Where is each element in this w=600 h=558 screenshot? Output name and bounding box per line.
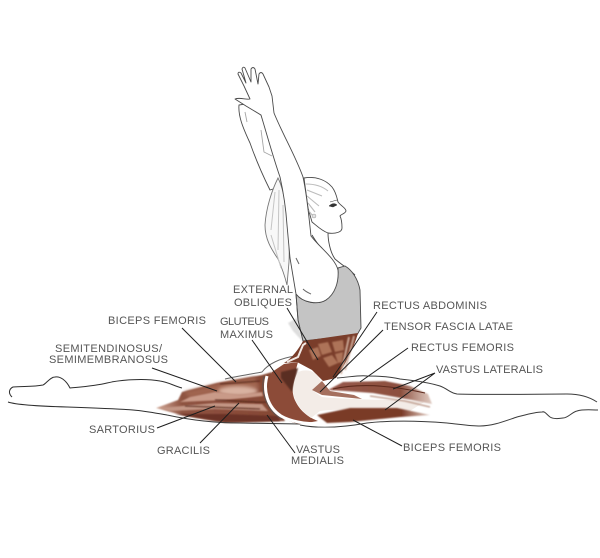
line: biceps femoris right xyxy=(353,420,402,446)
label: external obliques: EXTERNAL xyxy=(233,284,293,296)
back raised arm xyxy=(239,104,285,190)
left leg outline xyxy=(8,377,182,415)
line: vastus lateralis xyxy=(385,373,435,410)
tank top xyxy=(296,266,361,341)
line: tensor fascia latae xyxy=(320,330,383,392)
line: rectus femoris xyxy=(360,348,408,382)
right thigh upper muscles xyxy=(312,381,432,407)
label: semitendinosus / semimembranosus: SEMITENDINOSUS/ xyxy=(55,343,163,355)
line: sartorius xyxy=(157,406,215,428)
label: vastus medialis: MEDIALIS xyxy=(291,455,344,467)
label: gracilis: GRACILIS xyxy=(157,445,210,457)
leader lines xyxy=(152,308,435,453)
left thigh lower outline xyxy=(167,415,300,424)
label: semitendinosus / semimembranosus: SEMIMEMBRANOSUS xyxy=(49,354,168,366)
gluteus xyxy=(263,362,322,424)
line: semitendinosus xyxy=(152,368,217,391)
waistline xyxy=(296,294,303,341)
label: sartorius: SARTORIUS xyxy=(89,424,155,436)
line: external obliques xyxy=(287,308,318,360)
right hip tendon band xyxy=(293,370,424,418)
line: rectus abdominis xyxy=(333,312,377,377)
label: tensor fascia latae: TENSOR FASCIA LATAE xyxy=(384,321,513,333)
label: biceps femoris right: BICEPS FEMORIS xyxy=(403,442,501,454)
near raised arm and shoulder xyxy=(235,67,338,303)
abdominal muscles xyxy=(284,333,358,381)
ponytail xyxy=(265,178,289,285)
waist shadow xyxy=(288,318,303,342)
line: biceps femoris left xyxy=(182,328,236,382)
right thigh lower outline xyxy=(300,421,447,427)
right leg outline xyxy=(337,376,598,426)
right thigh lower muscle xyxy=(317,408,430,423)
label: gluteus maximus: MAXIMUS xyxy=(220,329,273,341)
left thigh upper double outline xyxy=(225,356,296,379)
label: external obliques: OBLIQUES xyxy=(234,297,292,309)
label: vastus lateralis: VASTUS LATERALIS xyxy=(436,364,543,376)
label: biceps femoris left: BICEPS FEMORIS xyxy=(108,315,206,327)
label: rectus abdominis: RECTUS ABDOMINIS xyxy=(373,300,487,312)
head and neck xyxy=(304,177,355,275)
label: vastus medialis: VASTUS xyxy=(296,444,340,456)
figure: dancer in a split xyxy=(8,67,598,427)
line: gracilis xyxy=(200,403,239,443)
line: vastus medialis xyxy=(267,415,295,453)
left leg muscles xyxy=(156,372,285,423)
label: gluteus maximus: GLUTEUS xyxy=(220,316,269,328)
label: rectus femoris: RECTUS FEMORIS xyxy=(411,342,514,354)
line: gluteus maximus xyxy=(252,340,282,383)
